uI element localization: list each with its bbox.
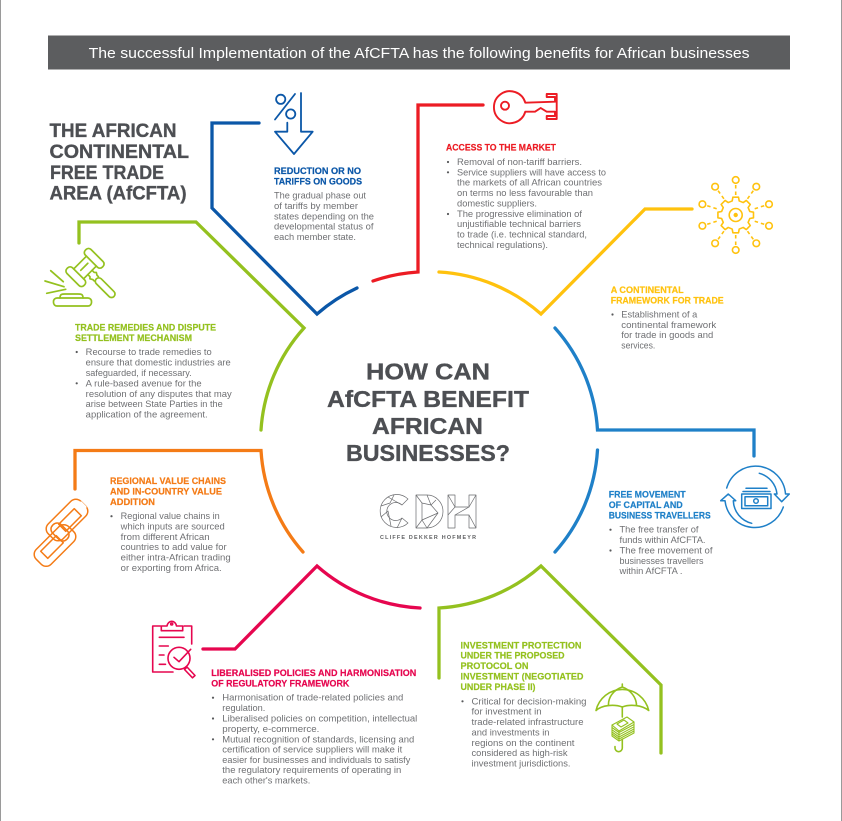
- heading: [609, 490, 711, 520]
- central question: [327, 358, 529, 466]
- panel: reduction or no tariffs: [212, 93, 374, 314]
- body bullets: Critical for decision-making: [472, 696, 586, 706]
- body bullets: Recourse to trade remedies to: [86, 347, 212, 357]
- heading: TRADE REMEDIES AND DISPUTE: [75, 323, 216, 333]
- heading: [460, 640, 584, 692]
- body bullets: the markets of all African countries: [457, 178, 602, 188]
- icon: key: [494, 91, 557, 123]
- heading: UNDER PHASE II): [460, 682, 536, 692]
- heading: LIBERALISED POLICIES AND HARMONISATION: [211, 668, 417, 678]
- connector arc: light blue lower: [555, 450, 598, 552]
- body bullets: regions on the continent: [472, 738, 575, 748]
- body bullets: continental framework: [621, 320, 717, 330]
- body bullets: The free movement of: [620, 546, 713, 556]
- heading: [274, 166, 362, 186]
- panel: continental framework for trade: [439, 177, 772, 350]
- icon: money with circular arrows: [721, 466, 789, 528]
- body bullets: [76, 347, 232, 420]
- heading: SETTLEMENT MECHANISM: [75, 333, 192, 343]
- icon: gear network: [699, 177, 772, 253]
- heading: [110, 476, 226, 507]
- panel: liberalised policies: [153, 566, 420, 786]
- body bullets: resolution of any disputes that may: [86, 389, 232, 399]
- banner: benefits heading: The successful Implementation of the AfCFTA has the following benefits for African businesses: [89, 45, 750, 62]
- heading: ADDITION: [110, 497, 155, 507]
- body bullets: funds within AfCFTA.: [620, 535, 706, 545]
- body bullets: certification of service suppliers will make it: [222, 744, 403, 754]
- connector: pink: [203, 566, 420, 649]
- body bullets: either intra-African trading: [121, 552, 231, 562]
- central question: AFRICAN: [372, 413, 483, 439]
- icon: gavel: [45, 247, 126, 309]
- connector: orange: [75, 450, 303, 552]
- body bullets: property, e-commerce.: [222, 724, 319, 734]
- icon: clipboard with magnifier: [153, 621, 195, 678]
- body text: developmental status of: [274, 222, 374, 232]
- heading: FRAMEWORK FOR TRADE: [611, 295, 724, 305]
- body bullets: safeguarded, if necessary.: [86, 368, 192, 378]
- body bullets: considered as high-risk: [472, 748, 568, 758]
- logo: Cliffe Dekker Hofmeyr: CLIFFE DEKKER HOFMEYR: [380, 535, 476, 541]
- heading: PROTOCOL ON: [460, 661, 529, 671]
- body bullets: which inputs are sourced: [120, 522, 225, 532]
- body bullets: technical regulations).: [457, 240, 548, 250]
- heading: REDUCTION OR NO: [274, 166, 361, 176]
- body bullets: [212, 693, 417, 786]
- heading: FREE MOVEMENT: [609, 490, 686, 500]
- body bullets: The free transfer of: [620, 525, 699, 535]
- icon: umbrella with money: [596, 684, 649, 752]
- heading: OF REGULATORY FRAMEWORK: [211, 678, 350, 688]
- body bullets: for trade in goods and: [621, 330, 713, 340]
- body bullets: Regional value chains in: [121, 511, 220, 521]
- body bullets: arise between State Parties in the: [86, 399, 223, 409]
- panel: access to the market: [373, 91, 606, 281]
- body bullets: and investments in: [472, 728, 550, 738]
- body bullets: from different African: [121, 532, 210, 542]
- heading: [611, 285, 724, 305]
- connector: blue: [212, 123, 357, 314]
- heading: AND IN-COUNTRY VALUE: [110, 486, 222, 496]
- title: The African Continental Free Trade Area: THE AFRICAN: [50, 120, 176, 142]
- body text: The gradual phase out: [274, 190, 366, 200]
- title: The African Continental Free Trade Area: [50, 120, 189, 204]
- title: The African Continental Free Trade Area: FREE TRADE: [50, 162, 164, 184]
- body bullets: for investment in: [472, 707, 542, 717]
- body bullets: countries to add value for: [121, 542, 227, 552]
- body text: states depending on the: [274, 211, 374, 221]
- body bullets: Removal of non-tariff barriers.: [457, 157, 582, 167]
- body bullets: on terms no less favourable than: [457, 188, 593, 198]
- icon: percent with down arrow: [275, 93, 313, 154]
- body bullets: [609, 525, 713, 576]
- heading: UNDER THE PROPOSED: [460, 651, 565, 661]
- body bullets: investment jurisdictions.: [472, 758, 570, 768]
- body bullets: to trade (i.e. technical standard,: [457, 230, 587, 240]
- body bullets: services.: [621, 340, 655, 350]
- body text: of tariffs by member: [274, 201, 358, 211]
- logo: Cliffe Dekker Hofmeyr: [380, 495, 476, 541]
- heading: A CONTINENTAL: [611, 285, 684, 295]
- heading: TARIFFS ON GOODS: [274, 176, 362, 186]
- heading: INVESTMENT (NEGOTIATED: [460, 672, 584, 682]
- panel: trade remedies and dispute settlement: [45, 222, 304, 430]
- connector: red: [373, 105, 483, 281]
- central question: BUSINESSES?: [346, 440, 510, 466]
- title: The African Continental Free Trade Area: AREA (AfCFTA): [50, 182, 186, 204]
- body bullets: Liberalised policies on competition, intellectual: [222, 714, 417, 724]
- body bullets: each other's markets.: [222, 776, 310, 786]
- heading: BUSINESS TRAVELLERS: [609, 510, 711, 520]
- heading: INVESTMENT PROTECTION: [460, 640, 582, 650]
- connector: green: [439, 566, 661, 753]
- heading: ACCESS TO THE MARKET: [446, 143, 556, 153]
- panel: free movement of capital: [555, 328, 789, 576]
- body bullets: regulation.: [222, 703, 265, 713]
- body bullets: [447, 157, 606, 250]
- panel: regional value chains: [31, 450, 303, 573]
- icon: chain links: [31, 496, 91, 569]
- banner: benefits heading: [48, 36, 790, 70]
- body bullets: unjustifiable technical barriers: [457, 219, 581, 229]
- connector: yellow: [439, 209, 692, 314]
- body bullets: application of the agreement.: [86, 410, 208, 420]
- body bullets: Mutual recognition of standards, licensing and: [222, 734, 414, 744]
- body text: [274, 190, 374, 242]
- body bullets: Establishment of a: [621, 310, 698, 320]
- connector: light blue: [555, 328, 754, 456]
- body bullets: Harmonisation of trade-related policies and: [222, 693, 403, 703]
- title: The African Continental Free Trade Area: CONTINENTAL: [50, 141, 189, 163]
- body bullets: The progressive elimination of: [457, 209, 582, 219]
- body bullets: Service suppliers will have access to: [457, 167, 606, 177]
- body bullets: [110, 511, 231, 573]
- panel: investment protection: [439, 566, 661, 768]
- body bullets: domestic suppliers.: [457, 198, 537, 208]
- connector: green left: [79, 222, 304, 430]
- body bullets: easier for businesses and individuals to satisfy: [222, 755, 411, 765]
- body bullets: [461, 696, 586, 768]
- heading: [75, 323, 216, 343]
- heading: REGIONAL VALUE CHAINS: [110, 476, 226, 486]
- body bullets: within AfCFTA .: [618, 566, 682, 576]
- heading: OF CAPITAL AND: [609, 500, 683, 510]
- body bullets: trade-related infrastructure: [472, 717, 584, 727]
- body text: each member state.: [274, 232, 356, 242]
- body bullets: A rule-based avenue for the: [86, 378, 202, 388]
- body bullets: the regulatory requirements of operating in: [222, 765, 401, 775]
- body bullets: ensure that domestic industries are: [86, 358, 231, 368]
- body bullets: or exporting from Africa.: [121, 563, 222, 573]
- central question: AfCFTA BENEFIT: [327, 386, 529, 412]
- heading: [211, 668, 417, 688]
- central question: HOW CAN: [366, 358, 490, 384]
- body bullets: [611, 310, 717, 350]
- body bullets: businesses travellers: [620, 556, 704, 566]
